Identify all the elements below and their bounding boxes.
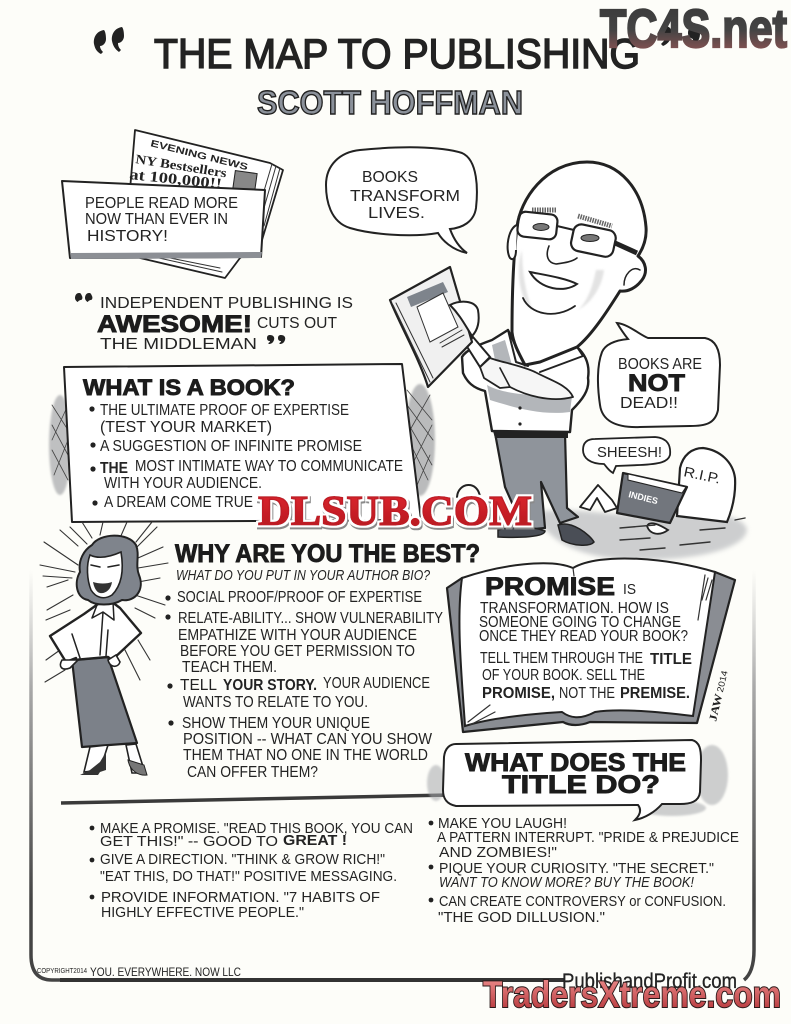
rays — [40, 522, 168, 682]
panel: promise open book: TITLE — [650, 651, 692, 668]
caption box — [62, 181, 265, 259]
list: title functions left column: "EAT THIS, DO THAT!" POSITIVE MESSAGING. — [100, 868, 397, 885]
illustration: woman — [40, 522, 168, 775]
panel: why are you the best: TELL — [180, 677, 217, 694]
panel: why are you the best: BEFORE YOU GET PERMISSION TO — [180, 643, 415, 660]
hand — [450, 302, 479, 336]
panel: why are you the best: RELATE-ABILITY... SHOW VULNERABILITY — [178, 610, 443, 627]
panel: why are you the best: SHOW THEM YOUR UNIQUE — [182, 715, 370, 732]
shirt — [462, 330, 589, 432]
speech bubble: books transform lives: BOOKS — [362, 169, 418, 186]
list: title functions right column — [429, 815, 739, 926]
panel: promise open book: NOT THE — [559, 685, 615, 702]
panel: why are you the best: THEM THAT NO ONE IN THE WORLD — [183, 747, 428, 764]
panel: what is a book: A DREAM COME TRUE — [104, 494, 253, 511]
list: title functions right column: "THE GOD DILLUSION." — [438, 909, 605, 926]
ear detail — [624, 269, 640, 285]
panel: what is a book: WHAT IS A BOOK? — [83, 375, 295, 400]
artist signature — [707, 669, 731, 723]
panel: what is a book: THE ULTIMATE PROOF OF EXPERTISE — [100, 402, 349, 419]
panel: promise open book: IS — [623, 581, 636, 598]
caption box: NOW THAN EVER IN — [85, 211, 228, 228]
panel: why are you the best: SOCIAL PROOF/PROOF OF EXPERTISE — [177, 589, 422, 606]
copyright: COPYRIGHT2014 — [37, 968, 87, 975]
list: title functions right column: MAKE YOU LAUGH! — [438, 815, 567, 832]
newspaper: NY Bestsellers — [135, 151, 228, 180]
list: title functions left column: HIGHLY EFFECTIVE PEOPLE." — [101, 904, 304, 921]
illustration: author holding a book — [390, 162, 646, 545]
artist signature: JAW — [707, 693, 725, 723]
panel: why are you the best: POSITION -- WHAT CAN YOU SHOW — [183, 731, 432, 748]
shirt shading — [487, 340, 572, 413]
list: title functions right column: AND ZOMBIES!" — [439, 844, 557, 861]
speech bubble: books are not dead: BOOKS ARE — [618, 356, 702, 373]
speech bubble: books are not dead: NOT — [628, 370, 685, 397]
opening quote marks — [94, 27, 124, 54]
speech bubble: books transform lives: LIVES. — [368, 205, 425, 222]
panel: why are you the best — [165, 540, 480, 781]
list: title functions left column: PROVIDE INFORMATION. "7 HABITS OF — [101, 889, 380, 906]
panel: why are you the best: YOUR AUDIENCE — [323, 675, 430, 692]
panel: what is a book: MOST INTIMATE WAY TO COMMUNICATE — [135, 458, 403, 475]
quote: independent publishing: CUTS OUT — [257, 315, 338, 332]
speech bubble: what does the title do: WHAT DOES THE — [465, 749, 686, 777]
website: PublishandProfit.com — [562, 970, 737, 993]
book cover — [447, 572, 735, 732]
panel: promise open book: TRANSFORMATION. HOW IS — [480, 600, 669, 617]
speech bubble: what does the title do — [427, 740, 728, 820]
panel: promise open book: ONCE THEY READ YOUR BOOK? — [479, 628, 688, 645]
face shading — [519, 250, 604, 310]
title: THE MAP TO PUBLISHING — [154, 30, 640, 77]
panel: promise open book: OF YOUR BOOK. SELL THE — [482, 667, 645, 684]
list: title functions right column: CAN CREATE CONTROVERSY or CONFUSION. — [439, 893, 726, 910]
speech bubble: books are not dead — [598, 323, 720, 427]
panel: what is a book: A SUGGESTION OF INFINITE PROMISE — [100, 438, 362, 455]
panel: promise open book: PROMISE — [485, 573, 615, 601]
ground shading — [537, 510, 747, 560]
quote: independent publishing: THE MIDDLEMAN — [100, 336, 257, 353]
newspaper: at 100,000!! — [129, 167, 223, 193]
panel: promise open book: TELL THEM THROUGH THE — [480, 650, 643, 667]
panel: why are you the best: CAN OFFER THEM? — [187, 764, 318, 781]
legs — [495, 433, 594, 545]
hands — [60, 655, 120, 669]
quote: independent publishing: INDEPENDENT PUBLISHING IS — [100, 295, 353, 312]
book crawling from grave — [580, 473, 745, 550]
list: title functions left column: GREAT ! — [283, 832, 347, 849]
gravestone: R.I.P. — [682, 463, 722, 487]
panel: why are you the best: WHAT DO YOU PUT IN YOUR AUTHOR BIO? — [176, 567, 431, 584]
list: title functions right column: WANT TO KNOW MORE? BUY THE BOOK! — [439, 874, 695, 891]
newspaper with caption box — [62, 130, 283, 278]
newspaper: EVENING NEWS — [149, 138, 249, 173]
gravestone — [677, 448, 735, 522]
held book — [390, 267, 472, 387]
panel: promise open book: PREMISE. — [620, 685, 690, 702]
copyright: YOU. EVERYWHERE. NOW LLC — [90, 965, 241, 979]
raised wrist — [466, 337, 490, 367]
panel: why are you the best: WHY ARE YOU THE BEST? — [175, 540, 480, 568]
panel: why are you the best: TEACH THEM. — [182, 659, 277, 676]
speech bubble: what does the title do: TITLE DO? — [502, 771, 660, 799]
speech bubble: sheesh: SHEESH! — [597, 444, 662, 461]
panel: what is a book — [49, 364, 435, 522]
list: title functions right column: PIQUE YOUR CURIOSITY. "THE SECRET." — [439, 860, 714, 877]
face — [87, 552, 122, 598]
hair — [77, 536, 141, 604]
panel: why are you the best: WANTS TO RELATE TO YOU. — [183, 694, 368, 711]
artist signature: 2014 — [715, 670, 730, 693]
list: title functions left column: GET THIS!" -- GOOD TO — [100, 833, 278, 850]
panel: promise open book: PROMISE, — [482, 685, 555, 702]
speech bubble: books transform lives — [326, 147, 477, 253]
divider line — [61, 795, 450, 803]
hatched shadows — [49, 384, 435, 496]
forearm — [480, 358, 573, 399]
eyes — [533, 224, 599, 242]
panel: why are you the best: YOUR STORY. — [223, 677, 317, 694]
list: title functions left column: GIVE A DIRECTION. "THINK & GROW RICH!" — [100, 851, 385, 868]
panel: what is a book: WITH YOUR AUDIENCE. — [104, 475, 262, 492]
left ear — [508, 225, 517, 259]
handle sketch — [457, 485, 480, 497]
panel: promise open book — [447, 558, 735, 732]
speech bubble: sheesh — [583, 437, 670, 473]
bubble shading — [427, 745, 728, 816]
quote: independent publishing — [75, 293, 353, 353]
panel: why are you the best: EMPATHIZE WITH YOUR AUDIENCE — [178, 627, 417, 644]
eyebrows — [532, 210, 612, 226]
outer frame — [31, 570, 754, 980]
caption box: HISTORY! — [87, 228, 168, 245]
list: title functions left column: MAKE A PROMISE. "READ THIS BOOK, YOU CAN — [100, 820, 413, 837]
chin line — [523, 298, 575, 314]
torso — [50, 602, 141, 662]
belt — [493, 431, 568, 438]
eyes and mouth — [91, 565, 119, 593]
copyright — [37, 965, 241, 979]
panel: what is a book: THE — [100, 460, 128, 477]
newspaper — [129, 130, 283, 278]
speech bubble: books are not dead: DEAD!! — [620, 395, 678, 412]
list: title functions left column — [90, 820, 413, 921]
skirt — [72, 657, 137, 747]
shirt cuff and buttons — [500, 368, 522, 426]
watermark: dlsub: DLSUB.COM — [258, 489, 532, 535]
author name: SCOTT HOFFMAN — [257, 84, 523, 121]
closing quote marks — [660, 26, 700, 47]
quote: independent publishing: AWESOME! — [97, 311, 252, 338]
caption box: PEOPLE READ MORE — [85, 195, 238, 212]
book crawling from grave: INDIES — [628, 489, 659, 506]
nose — [547, 246, 577, 264]
list: title functions right column: A PATTERN INTERRUPT. "PRIDE & PREJUDICE — [437, 829, 739, 846]
panel: what is a book: (TEST YOUR MARKET) — [100, 419, 272, 436]
panel: promise open book: SOMEONE GOING TO CHANGE — [479, 614, 681, 631]
glasses — [517, 211, 637, 258]
mouth — [530, 272, 577, 289]
book pages — [459, 558, 715, 726]
legs and shoes — [80, 744, 147, 775]
page shading — [468, 568, 712, 725]
head — [512, 162, 646, 365]
speech bubble: books transform lives: TRANSFORM — [350, 188, 460, 205]
collar — [508, 330, 583, 372]
